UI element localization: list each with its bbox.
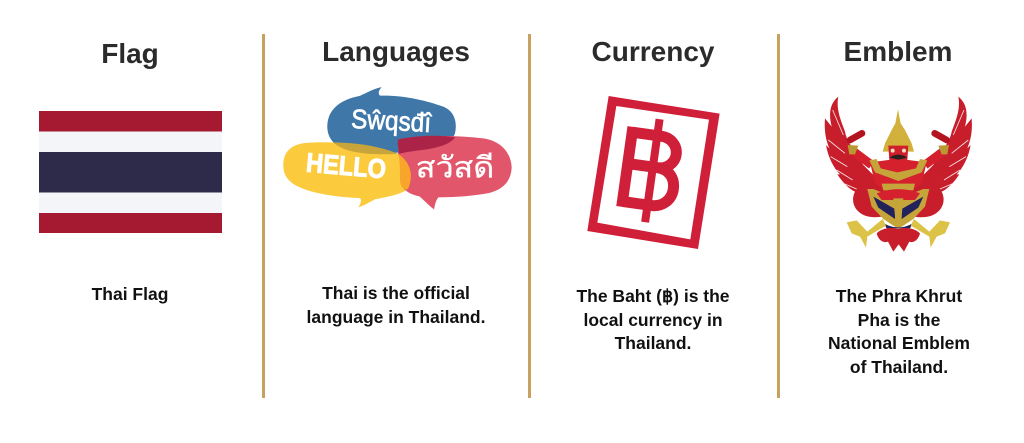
wings xyxy=(825,97,972,217)
caption: currency: The Baht (฿) is the xyxy=(576,286,730,306)
head xyxy=(888,146,908,164)
text: HELLO: HELLO xyxy=(305,147,387,184)
heading: Currency: Currency xyxy=(592,36,714,67)
skirt xyxy=(867,189,929,229)
caption: emblem: Pha is the xyxy=(858,310,940,330)
crown xyxy=(883,109,914,152)
caption: language xyxy=(307,283,485,326)
torso xyxy=(870,160,927,192)
caption: emblem: The Phra Khrut xyxy=(836,286,962,306)
caption: language: language in Thailand. xyxy=(307,306,485,326)
heading: Emblem: Emblem xyxy=(844,36,952,67)
caption: currency: Thailand. xyxy=(615,333,691,353)
caption: language: Thai is the official xyxy=(322,283,470,303)
caption: flag: Thai Flag xyxy=(92,284,168,304)
clubs and arms xyxy=(850,133,862,140)
caption: currency xyxy=(576,286,730,353)
heading: Flag: Flag xyxy=(101,38,159,69)
heading: Languages: Languages xyxy=(322,36,470,67)
caption: emblem xyxy=(828,286,970,376)
caption: emblem: National Emblem xyxy=(828,333,970,353)
tail xyxy=(877,228,920,252)
caption: emblem: of Thailand. xyxy=(850,356,948,376)
legs xyxy=(847,219,886,248)
caption: currency: local currency in xyxy=(583,310,723,330)
text: Sawasdee romanized: Sŵqsđî xyxy=(350,104,433,139)
text: Thai greeting: สวัสดี xyxy=(416,151,494,184)
